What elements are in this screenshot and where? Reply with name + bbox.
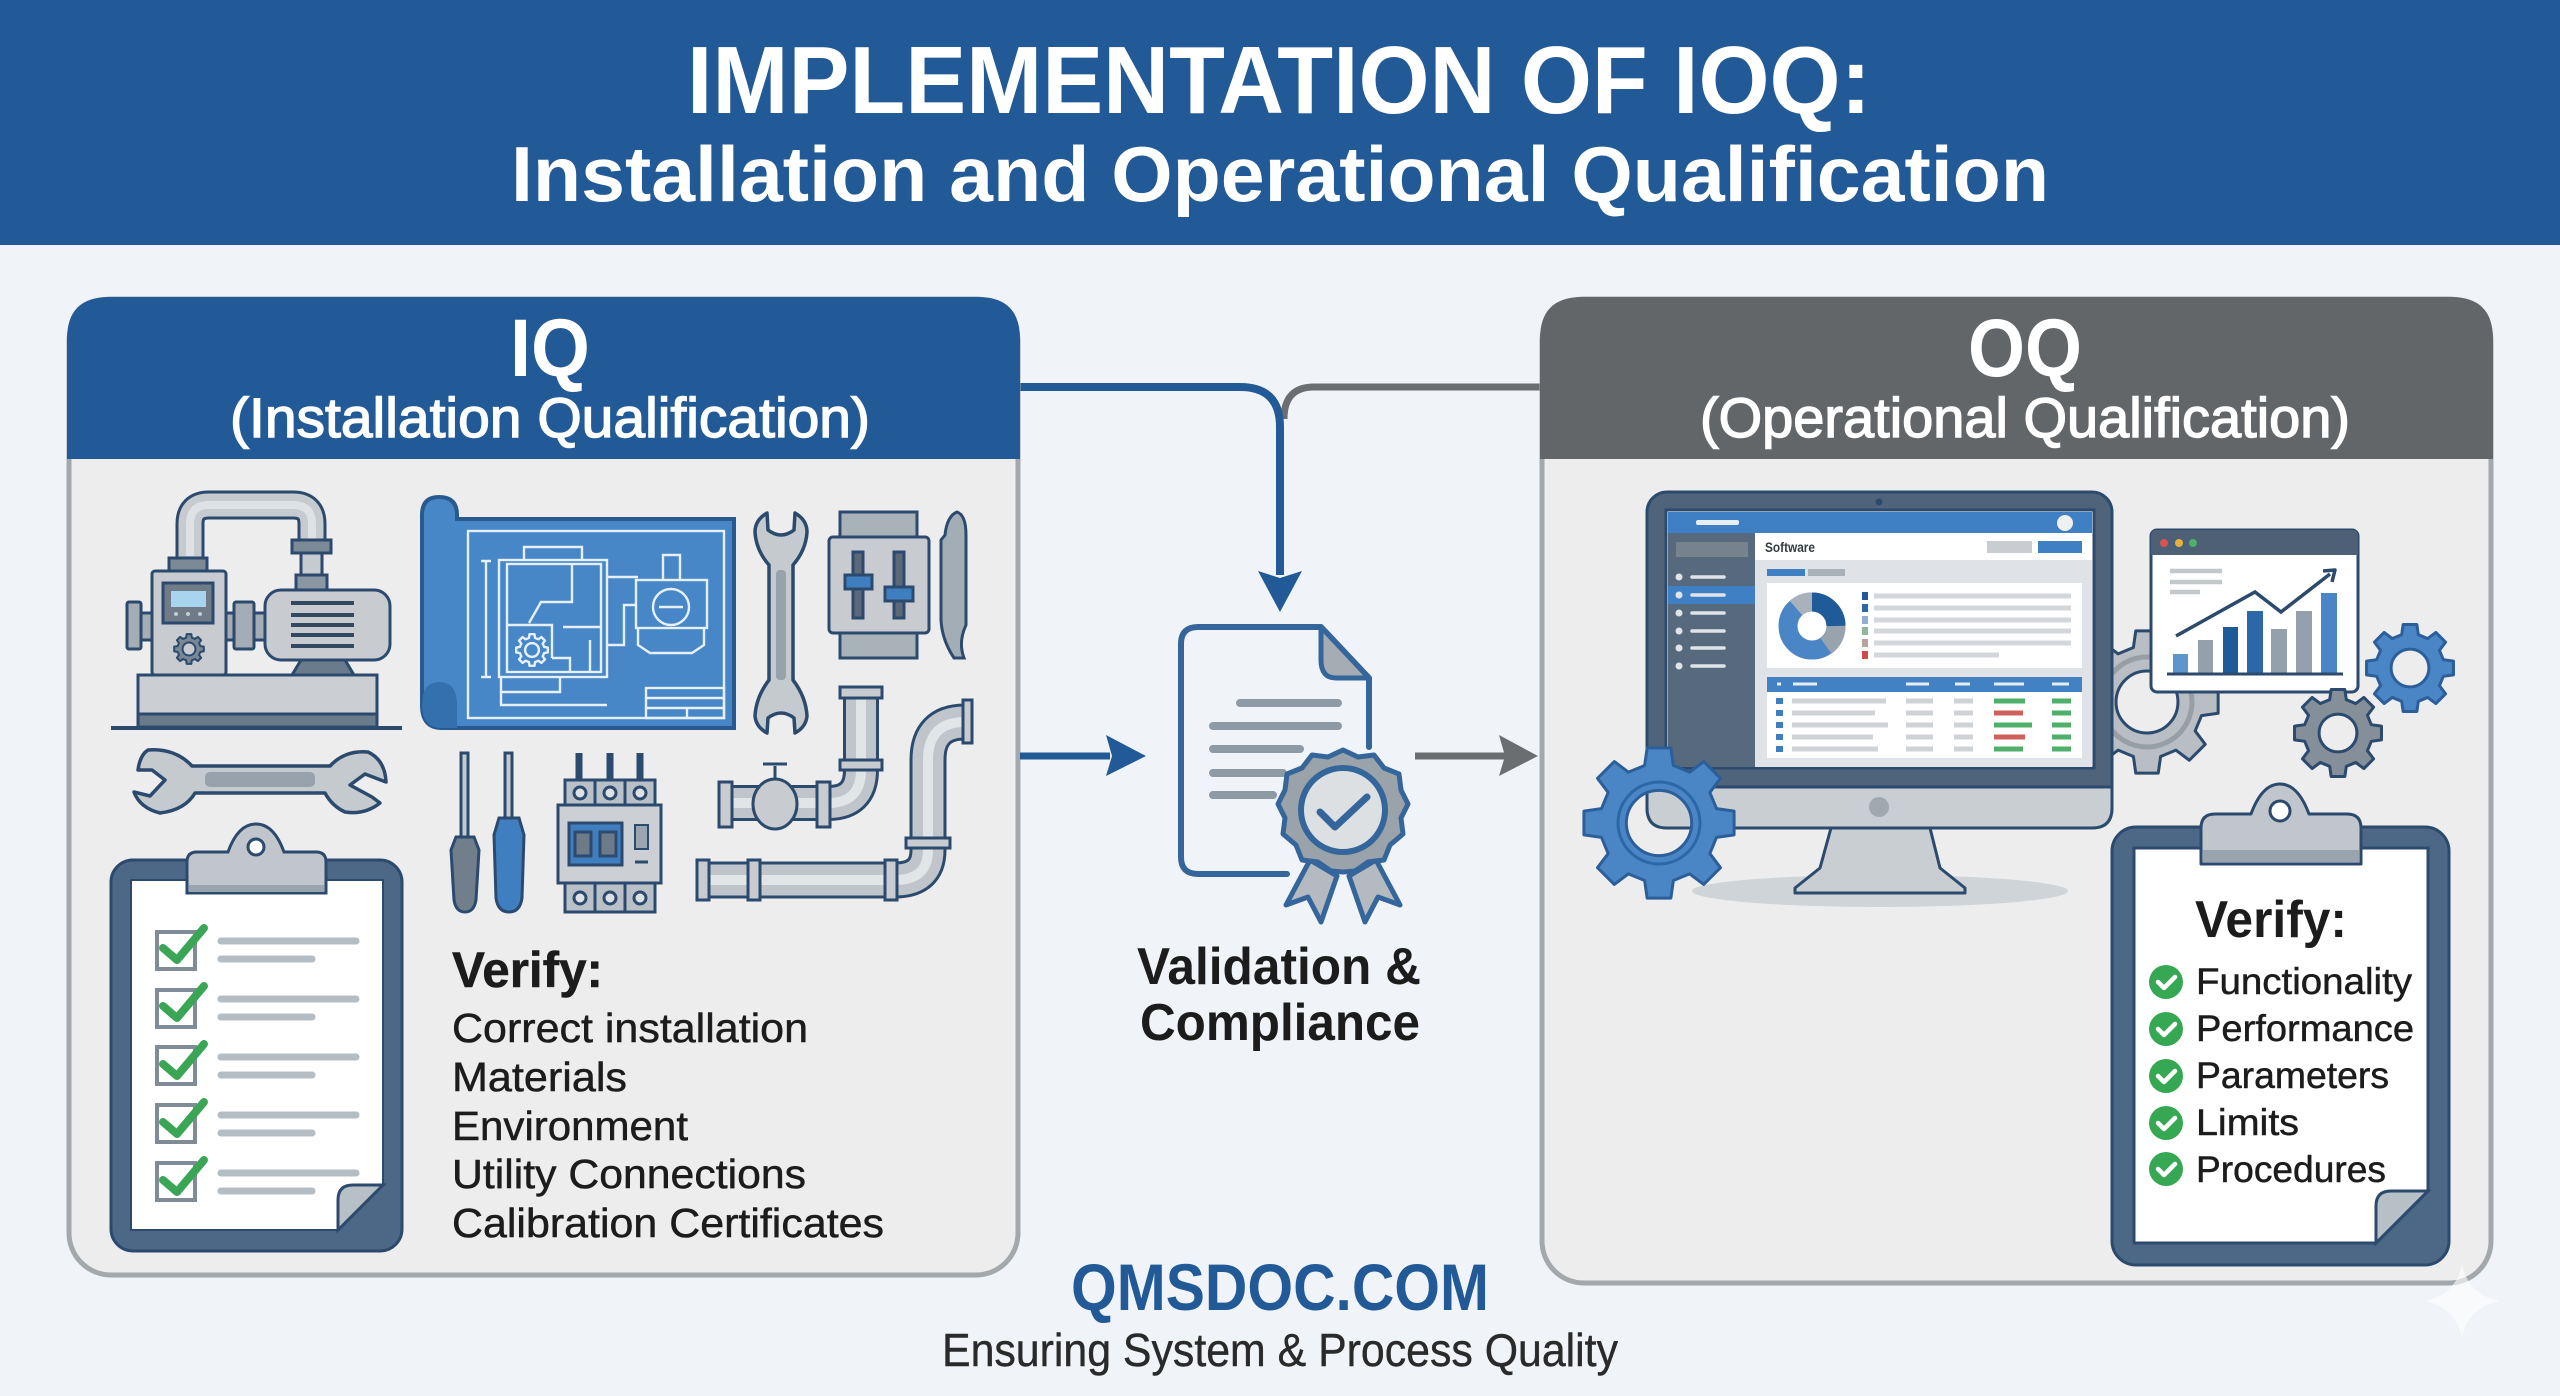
IQ verify list: Environment — [452, 1103, 689, 1149]
clipboard: OQ verify list — [2112, 784, 2449, 1265]
donut card — [1767, 583, 2082, 668]
checklist rows — [157, 928, 356, 1200]
chart window — [2151, 530, 2358, 692]
OQ subheading: (Operational Qualification) — [1700, 386, 2350, 449]
title banner — [0, 0, 2560, 245]
OQ verify items: Procedures — [2196, 1149, 2386, 1190]
OQ verify heading: Verify: — [2195, 891, 2347, 949]
watermark sparkle — [2424, 1264, 2500, 1338]
OQ verify items — [2196, 961, 2414, 1190]
icon: large blue gear — [1584, 748, 1734, 898]
IQ subheading: (Installation Qualification) — [230, 386, 870, 449]
IQ verify list: Correct installation — [452, 1005, 808, 1051]
OQ verify items: Limits — [2196, 1102, 2299, 1143]
OQ verify items: Performance — [2196, 1008, 2414, 1049]
label: validation and compliance — [1137, 938, 1421, 1052]
footer tagline: Ensuring System & Process Quality — [942, 1324, 1618, 1376]
arrow: IQ to document — [1020, 735, 1146, 776]
trend arrow — [2176, 570, 2335, 636]
IQ verify list — [452, 942, 884, 1246]
IQ verify list: Verify: — [452, 942, 603, 998]
IQ verify list: Materials — [452, 1054, 627, 1100]
panel: OQ — [1540, 297, 2493, 1283]
screen sidebar — [1668, 533, 1755, 767]
badge seal — [1278, 750, 1408, 872]
IQ verify list: Calibration Certificates — [452, 1200, 884, 1246]
IQ heading: IQ — [510, 303, 590, 394]
title line 2: Installation and Operational Qualification — [511, 130, 2049, 218]
OQ verify items: Functionality — [2196, 961, 2413, 1002]
icon: horizontal wrench — [134, 750, 386, 813]
icon: monitor — [1647, 492, 2112, 907]
footer brand: QMSDOC.COM — [1071, 1250, 1489, 1324]
icon: side tool — [941, 512, 966, 658]
label: validation and compliance: Validation & — [1137, 938, 1421, 996]
panel: IQ — [67, 297, 1020, 1275]
icon: circuit breaker — [558, 753, 661, 912]
icon: pump — [111, 505, 402, 728]
screen top bar — [1668, 512, 2092, 533]
icon: small blue gear — [2367, 625, 2453, 711]
icon: pipes with valve — [697, 687, 972, 900]
title line 1: IMPLEMENTATION OF IOQ: — [687, 27, 1871, 134]
bar chart — [2167, 593, 2343, 674]
icon: compliance document with badge — [1181, 627, 1408, 922]
icon: blueprint — [422, 497, 734, 728]
icon: large grey gear — [2076, 631, 2218, 773]
icon: screwdrivers — [451, 753, 524, 912]
IQ verify list: Utility Connections — [452, 1151, 806, 1197]
connector arrow: IQ to validation — [1020, 387, 1540, 612]
OQ verify items: Parameters — [2196, 1055, 2389, 1096]
OQ heading: OQ — [1968, 303, 2082, 394]
icon: small grey gear — [2295, 690, 2381, 776]
arrow: document to OQ — [1415, 735, 1538, 776]
icon: vertical wrench — [755, 513, 807, 733]
green check bullets — [2149, 965, 2183, 1186]
data table — [1767, 677, 2082, 758]
clipboard: IQ checklist — [111, 824, 402, 1251]
software label: Software — [1765, 539, 1815, 555]
badge ribbons — [1286, 860, 1400, 922]
icon: electrical panel — [829, 512, 929, 658]
label: validation and compliance: Compliance — [1140, 994, 1420, 1052]
